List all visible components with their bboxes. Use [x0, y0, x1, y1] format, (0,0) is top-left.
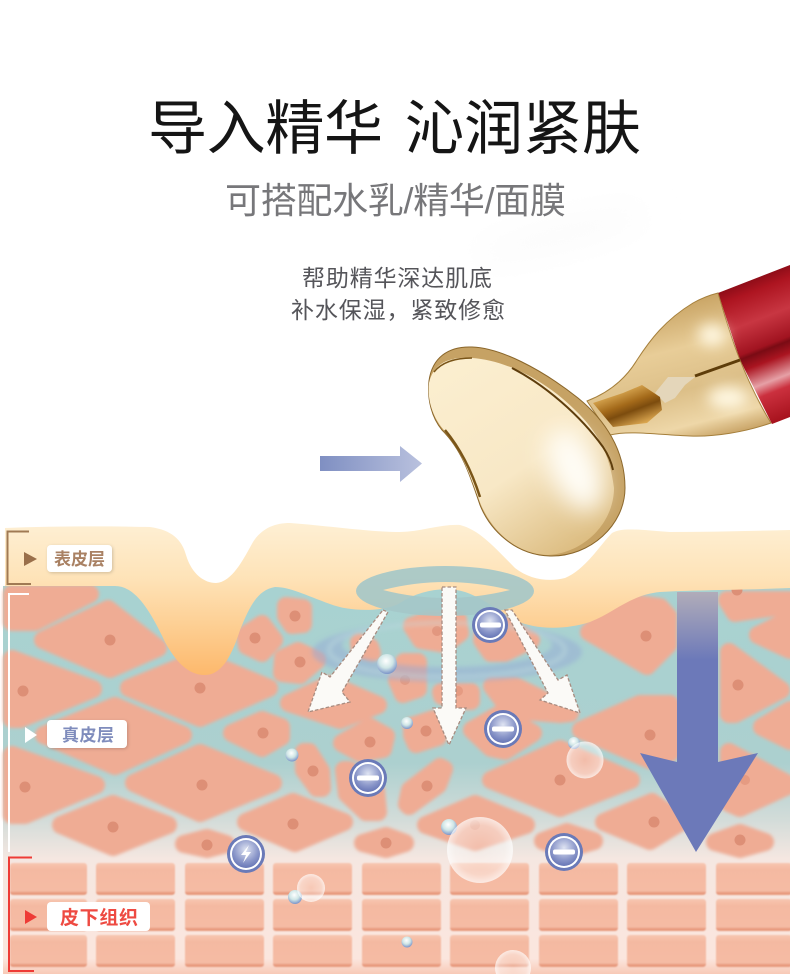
subtitle: 可搭配水乳/精华/面膜 — [225, 180, 566, 221]
red handle — [718, 265, 790, 424]
title: 沁润紧肤 — [405, 96, 641, 162]
upper swirl ring — [356, 566, 534, 616]
label: subcutaneous tissue — [9, 858, 150, 971]
head highlights — [535, 420, 615, 520]
neck seam — [695, 360, 740, 376]
label: epidermis — [8, 532, 112, 584]
panel: skin layers diagram — [3, 523, 790, 974]
lightning badge — [227, 835, 265, 873]
label: subcutaneous tissue: 皮下组织 — [60, 907, 138, 929]
arrow: dashed right — [505, 610, 580, 713]
head shadow crescent — [445, 430, 480, 497]
label: dermis — [9, 594, 127, 852]
title: 导入精华 — [148, 96, 383, 162]
minus badge — [545, 833, 583, 871]
translucent bubbles — [297, 742, 604, 974]
gold head rim — [429, 347, 625, 556]
lower swirl ring — [312, 622, 582, 682]
head rim dark line — [512, 368, 613, 470]
subcutaneous tissue bricks — [10, 863, 790, 967]
epidermis layer — [5, 523, 790, 675]
arrow: dashed centre — [433, 587, 466, 745]
description text — [291, 265, 505, 323]
water droplets — [286, 654, 580, 948]
gold connector — [593, 385, 662, 427]
arrow: dashed left — [308, 610, 388, 712]
title — [148, 96, 641, 162]
neck highlights — [698, 324, 748, 409]
minus badge — [484, 710, 522, 748]
arrow: pointing toward device — [320, 446, 422, 482]
device: beauty bar — [429, 265, 790, 556]
neck reflection — [655, 377, 695, 403]
dermis background — [3, 586, 790, 974]
cell nuclei — [18, 584, 750, 850]
label: epidermis: 表皮层 — [54, 549, 105, 569]
gold neck — [587, 293, 771, 436]
arrow: big blue down — [640, 592, 758, 852]
minus badge — [472, 607, 508, 643]
description text: 帮助精华深达肌底 — [302, 265, 492, 291]
minus badge — [349, 759, 387, 797]
label: dermis: 真皮层 — [62, 725, 114, 745]
description text: 补水保湿，紧致修愈 — [291, 297, 505, 323]
dermis cells — [12, 594, 790, 849]
gold head face — [429, 358, 614, 555]
